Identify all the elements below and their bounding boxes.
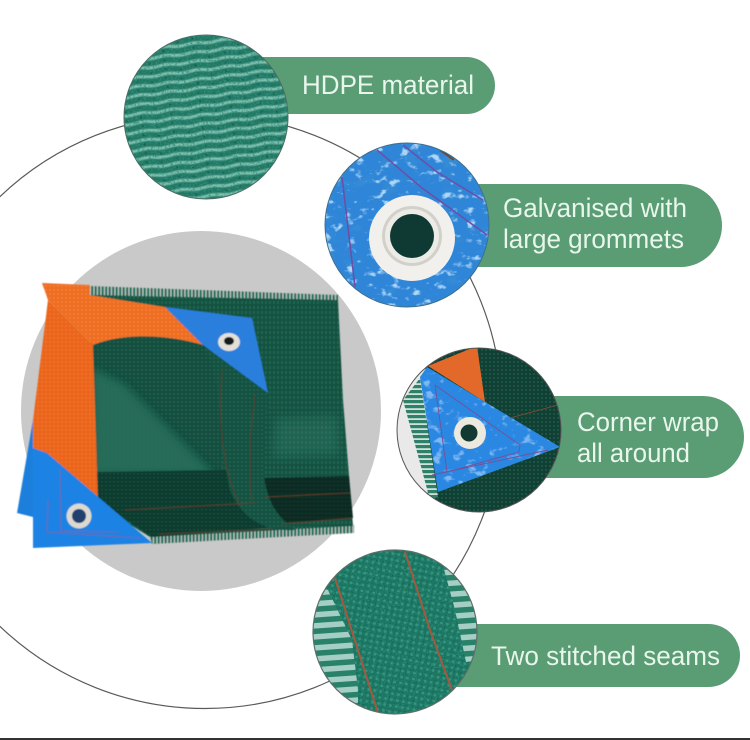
bottom edge line — [0, 738, 750, 740]
pill: galvanised with large grommets: large grommets — [503, 224, 684, 254]
net body — [90, 295, 353, 537]
pill: corner wrap all around — [530, 396, 744, 478]
open mesh right — [444, 567, 476, 662]
blue top corner wrap — [165, 307, 268, 393]
blue rear corner wrap — [17, 420, 33, 517]
large grommet — [369, 195, 455, 281]
mesh edge strip — [403, 378, 438, 500]
blue wrap — [420, 367, 560, 492]
net bottom fringe — [150, 525, 354, 544]
lighter band on right panel — [272, 415, 340, 458]
pill: two stitched seams — [450, 624, 740, 687]
connecting circle outline — [0, 114, 502, 708]
lower grommet — [66, 504, 92, 528]
orange panel — [428, 346, 485, 402]
pill: galvanised with large grommets — [470, 184, 722, 267]
net seam — [510, 405, 558, 418]
pill: HDPE material — [240, 57, 495, 114]
lower corner stitching — [47, 470, 140, 538]
flap lit area — [92, 368, 215, 475]
net top fringe — [90, 286, 338, 302]
corner grommet — [454, 417, 486, 449]
rusty top edge — [440, 150, 454, 160]
pill: galvanised with large grommets: Galvanised with — [503, 193, 687, 223]
flap right strip — [203, 345, 296, 530]
pill: corner wrap all around: all around — [577, 438, 690, 468]
grey backdrop circle — [21, 231, 381, 591]
top grommet — [218, 333, 240, 351]
orange top flap — [42, 283, 203, 345]
detail circle: stitched seams — [310, 548, 480, 718]
pill: HDPE material: HDPE material — [302, 70, 474, 100]
detail circle: corner wrap — [395, 345, 565, 515]
dark net — [425, 345, 565, 515]
wrap stitching — [432, 385, 548, 475]
product photo: folded shade net — [17, 283, 354, 548]
tarp seam stitching — [342, 145, 487, 287]
pill: corner wrap all around: Corner wrap — [577, 407, 719, 437]
orange left panel — [33, 300, 98, 500]
dark right lower band — [262, 476, 353, 523]
detail circle: HDPE mesh close-up — [120, 30, 292, 204]
shaded lower band — [97, 470, 275, 537]
wrap highlights — [422, 372, 557, 484]
seam stitching — [335, 552, 452, 713]
net red seams — [125, 370, 352, 534]
detail circle: grommet on blue tarp — [320, 140, 495, 312]
open mesh left — [314, 590, 358, 704]
folded flap upper — [93, 336, 225, 472]
pill: two stitched seams: Two stitched seams — [491, 641, 720, 671]
blue lower corner wrap — [33, 448, 152, 548]
